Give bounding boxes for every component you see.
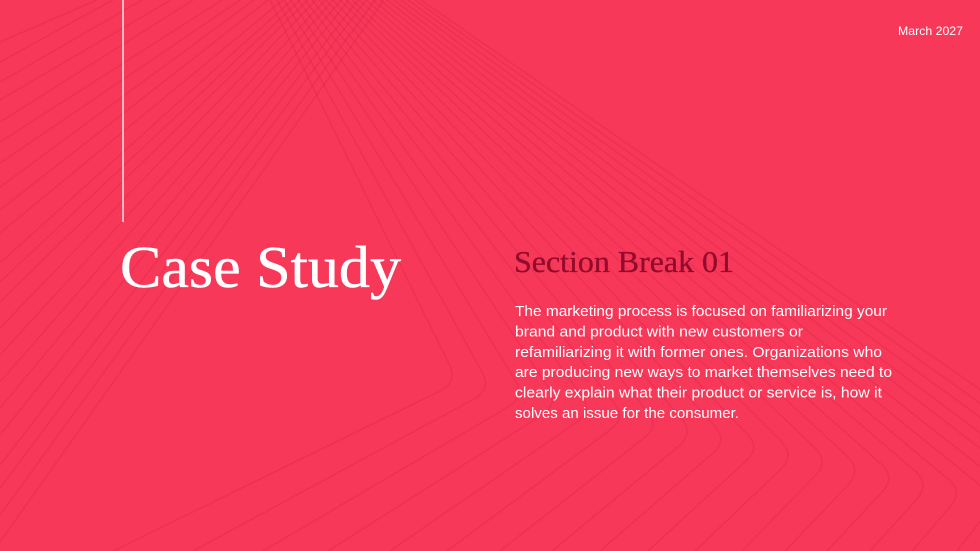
section heading: Section Break 01 [514,244,734,279]
body paragraph: The marketing process is focused on familiarizing your [515,303,887,320]
body paragraph: refamiliarizing it with former ones. Organizations who [515,344,882,361]
body paragraph: brand and product with new customers or [515,323,803,340]
body paragraph: solves an issue for the consumer. [515,405,739,422]
vertical accent line [122,0,124,222]
date: March 2027 [898,24,963,38]
body paragraph [515,303,892,422]
title: Case Study [120,234,402,300]
body paragraph: are producing new ways to market themselves need to [515,364,892,381]
body paragraph: clearly explain what their product or service is, how it [515,385,883,402]
